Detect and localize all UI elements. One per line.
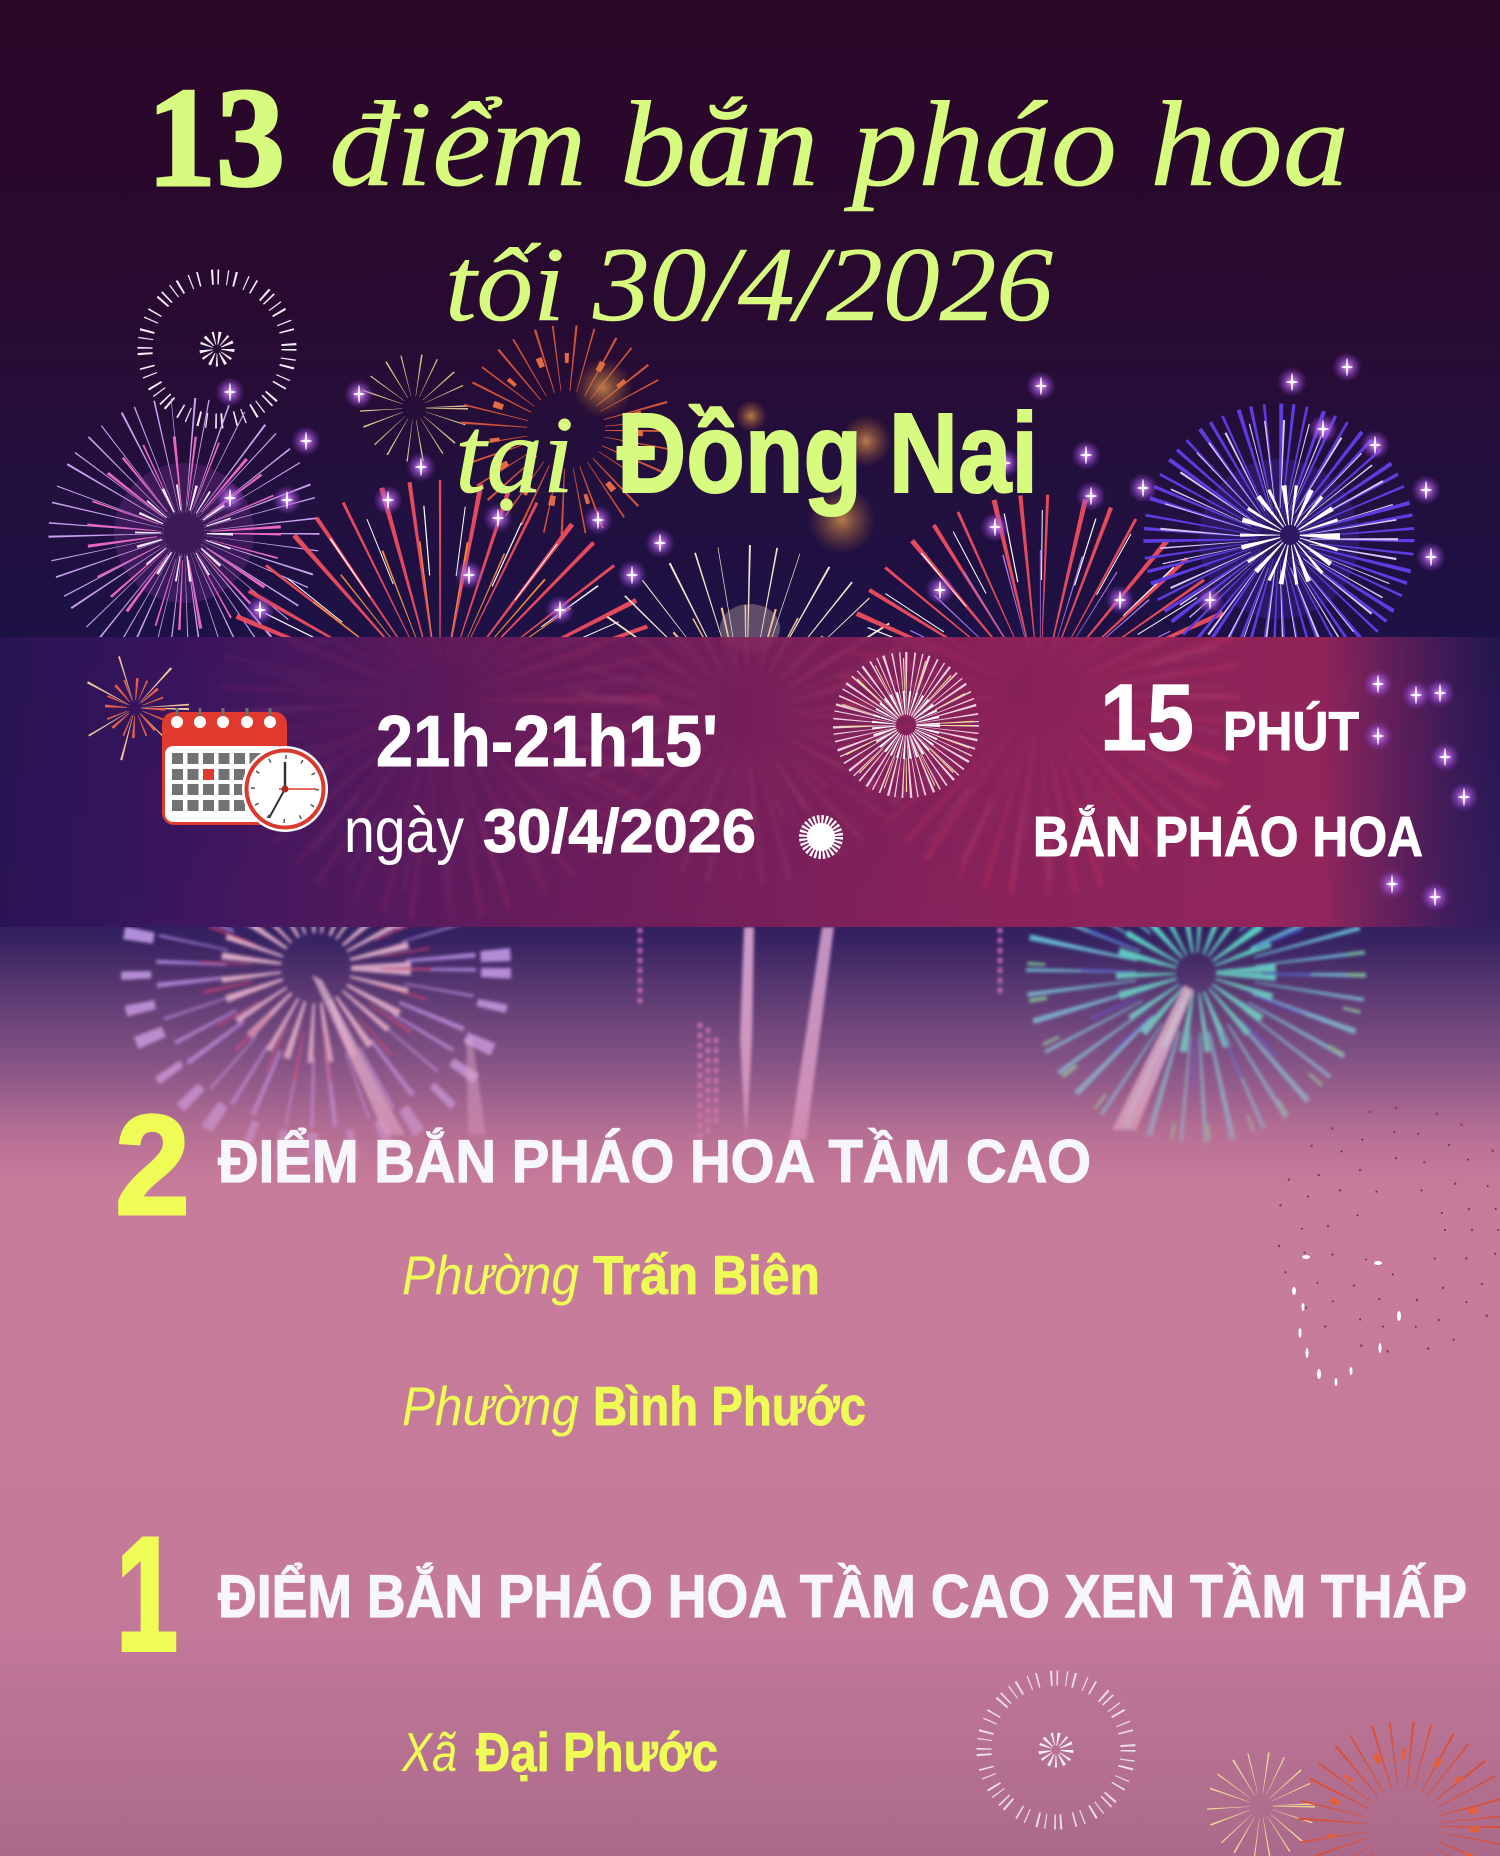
location: Đại Phước: Đại Phước [476,1721,718,1783]
duration text: BẮN PHÁO HOA [1033,804,1423,869]
firework: gold burst [381,375,447,441]
fireworks: dim bursts under band [280,540,1190,860]
title line 1 [147,58,1349,216]
time text: ngày [344,796,464,866]
title line 3: Đồng Nai [617,390,1038,516]
title line 1: 13 [147,58,285,216]
location: Trấn Biên [402,1244,820,1306]
firework: white-pink burst on band [856,675,956,775]
calendar body [162,712,287,825]
firework: purple burst left [106,455,262,611]
title [147,58,1349,516]
location: Bình Phước [402,1375,866,1437]
firework: dotted spray lower right [1278,1108,1500,1352]
band: time strip [0,637,1500,927]
sparkles: right of band [1363,669,1479,912]
firework: big fans over sky [236,480,1232,637]
location: Bình Phước: Bình Phước [593,1375,866,1437]
firework: orange arcs [494,358,638,502]
time text: 30/4/2026 [483,797,756,865]
duration text [1033,665,1423,869]
firework: small red burst near calendar [105,678,165,738]
duration text: 15 [1100,665,1194,771]
firework: pink burst left [119,927,513,1164]
fireworks: upper sky [48,270,1445,637]
clock [242,746,328,832]
location: Đại Phước [400,1721,718,1783]
overlay: fade into pink [0,940,1500,1206]
location: Đại Phước: Xã [400,1721,457,1783]
title line 1: điểm bắn pháo hoa [329,77,1349,212]
title line 3: tại [455,394,574,516]
fireworks: lower sky [119,927,1368,1164]
location: Trấn Biên: Trấn Biên [593,1244,820,1306]
icon: calendar with clock [162,708,328,832]
firework: gold burst bottom [1228,1773,1294,1839]
firework: small white burst on band [805,821,837,853]
duration text: PHÚT [1223,700,1359,762]
firework: orange arcs bottom [1331,1754,1475,1856]
section: 1 mixed-altitude point [116,1504,1467,1783]
firework: white ring bottom [984,1678,1128,1822]
location: Bình Phước: Phường [402,1375,579,1437]
firework trails [312,927,1194,1140]
firework: white drops ring [1292,1255,1401,1386]
heading: ĐIỂM BẮN PHÁO HOA TẦM CAO [218,1128,1091,1195]
number 2: 2 [115,1086,190,1245]
sparkles: purple stars [215,352,1446,625]
glows: orange [573,358,892,554]
number 1: 1 [116,1504,178,1685]
title line 2: tối 30/4/2026 [445,226,1053,343]
section: 2 high-altitude points [115,1086,1091,1437]
firework: violet burst right [1199,459,1359,619]
calendar rings [171,708,276,728]
location: Trấn Biên: Phường [402,1244,579,1306]
calendar grid [172,753,260,811]
title line 3 [455,390,1038,516]
firework: white ring [145,277,289,421]
firework: teal burst right [1024,927,1368,1144]
time text: 21h-21h15' [376,702,718,782]
time text [344,702,756,866]
